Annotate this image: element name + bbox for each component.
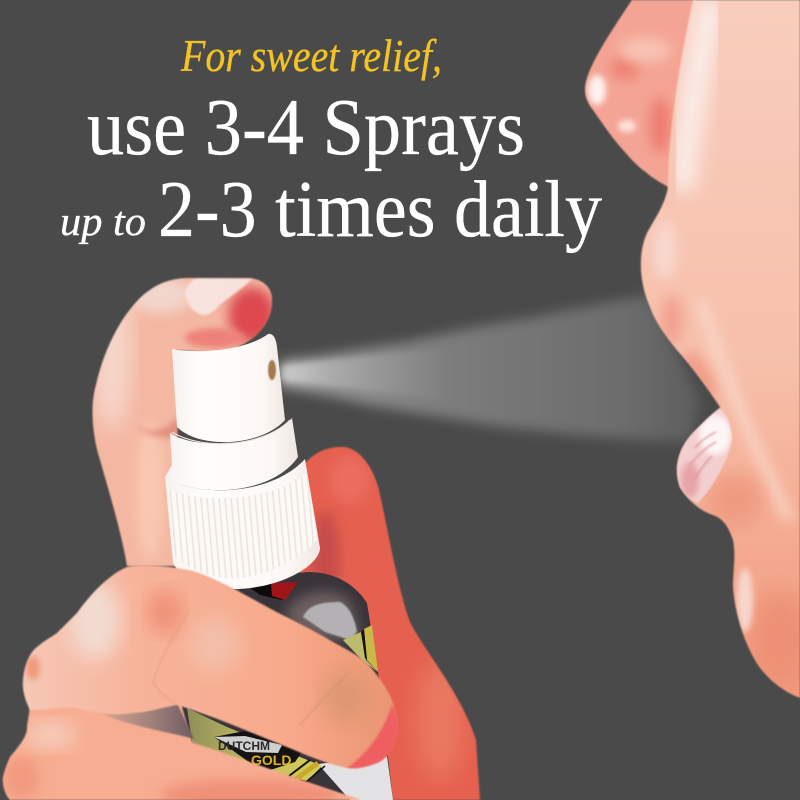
nose: [584, 0, 696, 188]
spray mist: [280, 295, 700, 442]
nozzle: [268, 360, 276, 380]
red and black neck: [245, 582, 298, 600]
nose highlights: [588, 75, 606, 105]
spray count: use 3-4 Sprays: [87, 84, 525, 172]
index finger: [92, 277, 273, 567]
white label: [318, 756, 393, 800]
pale left side: [69, 580, 121, 660]
lower lip: [676, 408, 733, 504]
tagline: For sweet relief,: [180, 30, 442, 81]
shadow gap under thumb: [100, 703, 194, 739]
brand badge: GOLD: [251, 752, 291, 768]
fingernail: [185, 278, 252, 315]
finger crease: [140, 417, 178, 440]
frequency: 2-3 times daily: [158, 166, 602, 254]
brand badge: DUTCHM: [218, 739, 270, 753]
cap shoulder: [165, 418, 298, 490]
thumb: [22, 565, 398, 770]
headline: [60, 30, 602, 254]
brand badge: [214, 731, 302, 772]
bottle highlight: [303, 602, 357, 640]
spray bottle: [165, 334, 393, 800]
hand: back finger behind bottle: [299, 446, 481, 800]
yellow label: [187, 708, 322, 781]
stripe ends: [289, 760, 310, 776]
lip texture: [690, 432, 716, 480]
thumb nail: [347, 705, 399, 770]
upper lip pale: [653, 220, 677, 280]
face profile: [575, 0, 800, 710]
big threaded cap: [165, 459, 320, 589]
finger pale side: [92, 270, 132, 430]
label stripes: [343, 632, 378, 672]
diagonal pale band: [700, 300, 790, 520]
cap ribs: [168, 472, 317, 579]
shoulder shadow ring: [172, 420, 290, 444]
joint area: [189, 617, 241, 673]
philtrum shade: [660, 295, 684, 345]
brown shoulder glow: [285, 591, 362, 640]
palm and lower finger: [2, 704, 362, 800]
frequency qualifier: up to: [60, 198, 146, 244]
dark fingertip: [323, 672, 367, 724]
palm creases: [152, 643, 176, 704]
actuator: [172, 334, 285, 442]
bottle body: [180, 572, 393, 800]
pale glare along nose edge: [682, 0, 712, 190]
knuckles: [148, 590, 182, 634]
cheek and skin: [630, 0, 800, 710]
chin: [750, 590, 800, 690]
fingertip red: [228, 287, 276, 343]
orange under lip: [709, 474, 761, 526]
